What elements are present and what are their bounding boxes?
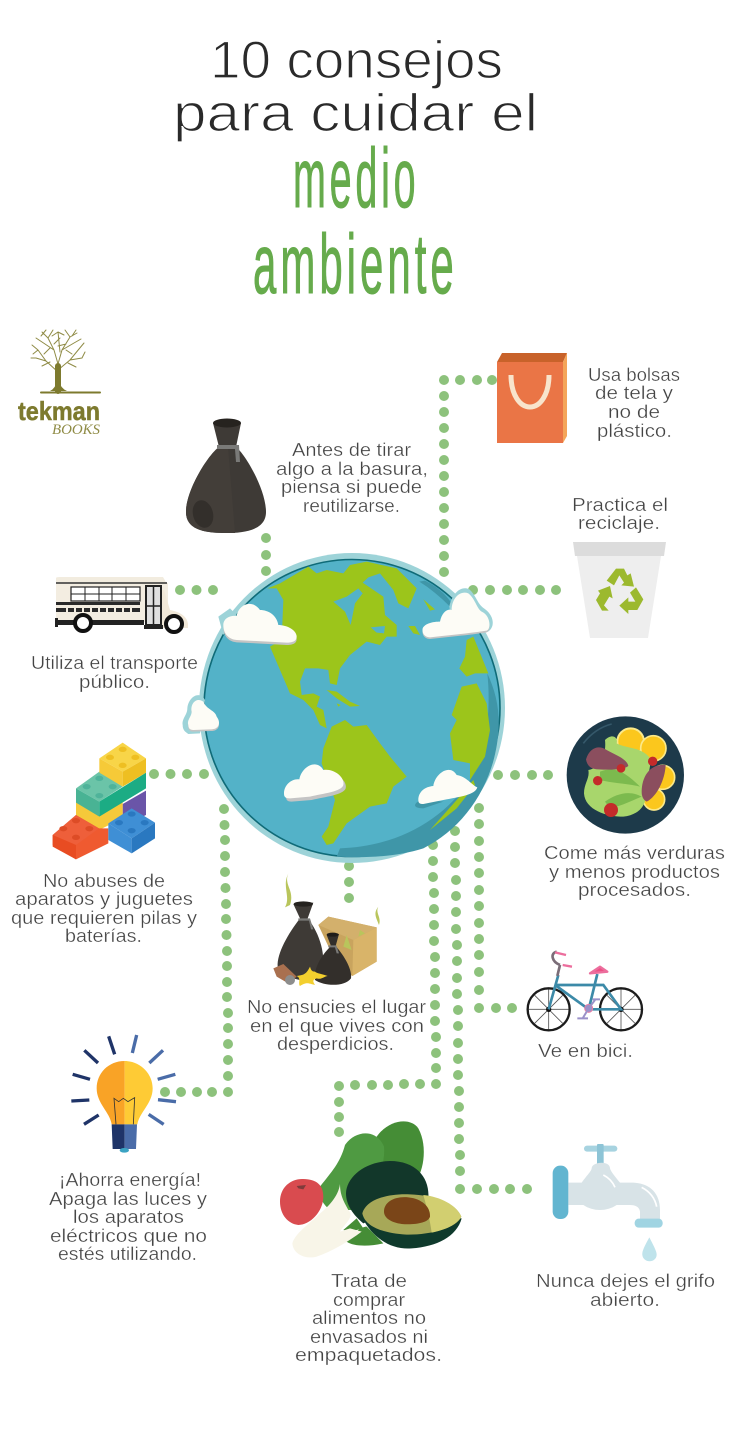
text: energía: estés utilizando.	[58, 1244, 197, 1264]
connector dots	[149, 375, 561, 1194]
text: verduras: procesados.	[578, 880, 691, 900]
text: desperdicios	[247, 997, 426, 1054]
text: bolsas: de tela y	[595, 383, 673, 403]
title	[173, 31, 538, 312]
text: envasados: Trata de	[331, 1271, 407, 1291]
text: reciclaje	[572, 495, 668, 533]
text: bolsas: Usa bolsas	[588, 365, 680, 385]
text: bolsas	[588, 365, 680, 441]
icon: salad plate	[567, 716, 684, 834]
icon: reusable garbage bag	[186, 418, 266, 533]
logo: tekman books: tekman	[18, 396, 100, 426]
text: reutilizar: Antes de tirar	[292, 440, 411, 460]
text: reutilizar	[276, 440, 428, 516]
text: energía: eléctricos que no	[50, 1226, 207, 1246]
text: envasados: empaquetados.	[295, 1345, 442, 1365]
text: desperdicios: desperdicios.	[277, 1034, 394, 1054]
globe	[199, 553, 505, 863]
icon: waste pile	[273, 873, 380, 986]
text: envasados	[295, 1271, 442, 1365]
title: medio	[293, 131, 419, 225]
text: verduras: y menos productos	[549, 862, 720, 882]
text: pilas: que requieren pilas y	[11, 908, 197, 928]
text: reutilizar: piensa si puede	[281, 477, 422, 497]
globe shadow	[337, 581, 499, 857]
text: transporte: Utiliza el transporte	[31, 653, 198, 673]
text: pilas	[11, 871, 197, 946]
title: 10 consejos	[210, 31, 503, 90]
text: pilas: No abuses de	[43, 871, 165, 891]
text: reutilizar: algo a la basura,	[276, 459, 428, 479]
icon: toy bricks	[53, 743, 155, 859]
text: energía: Apaga las luces y	[49, 1189, 207, 1209]
text: energía	[49, 1170, 207, 1264]
text: grifo: abierto.	[590, 1290, 660, 1310]
text: reciclaje: reciclaje.	[578, 513, 660, 533]
icon: bicycle	[528, 952, 642, 1030]
text: desperdicios: en el que vives con	[250, 1016, 424, 1036]
text: envasados: alimentos no	[312, 1308, 426, 1328]
text: transporte: público.	[79, 672, 150, 692]
icon: light bulb	[71, 1035, 176, 1153]
clouds	[183, 588, 493, 808]
logo: tekman books	[18, 330, 100, 438]
icon: recycling bin	[573, 542, 666, 638]
text: bolsas: plástico.	[597, 421, 672, 441]
icon: water tap	[553, 1144, 663, 1261]
text: grifo	[536, 1271, 715, 1310]
text: pilas: baterías.	[65, 926, 142, 946]
text: reutilizar: reutilizarse.	[303, 496, 400, 516]
text: envasados: envasados ni	[310, 1327, 428, 1347]
text: energía: los aparatos	[73, 1207, 184, 1227]
text: desperdicios: No ensucies el lugar	[247, 997, 426, 1017]
icon: school bus	[55, 577, 188, 632]
land masses	[267, 562, 490, 845]
text: envasados: comprar	[333, 1290, 405, 1310]
icon: shopping bag	[497, 353, 567, 443]
text: bolsas: no de	[608, 402, 660, 422]
logo: tekman books: BOOKS	[52, 422, 100, 438]
text: verduras: Come más verduras	[544, 843, 725, 863]
icon: fresh food	[280, 1121, 462, 1257]
text: verduras	[544, 843, 725, 900]
title: para cuidar el	[173, 84, 538, 143]
text: grifo: Nunca dejes el grifo	[536, 1271, 715, 1291]
text: energía: ¡Ahorra energía!	[59, 1170, 201, 1190]
text: bici: Ve en bici.	[538, 1041, 633, 1061]
text: transporte	[31, 653, 198, 692]
title: ambiente	[253, 218, 458, 312]
text: pilas: aparatos y juguetes	[15, 889, 193, 909]
text: reciclaje: Practica el	[572, 495, 668, 515]
